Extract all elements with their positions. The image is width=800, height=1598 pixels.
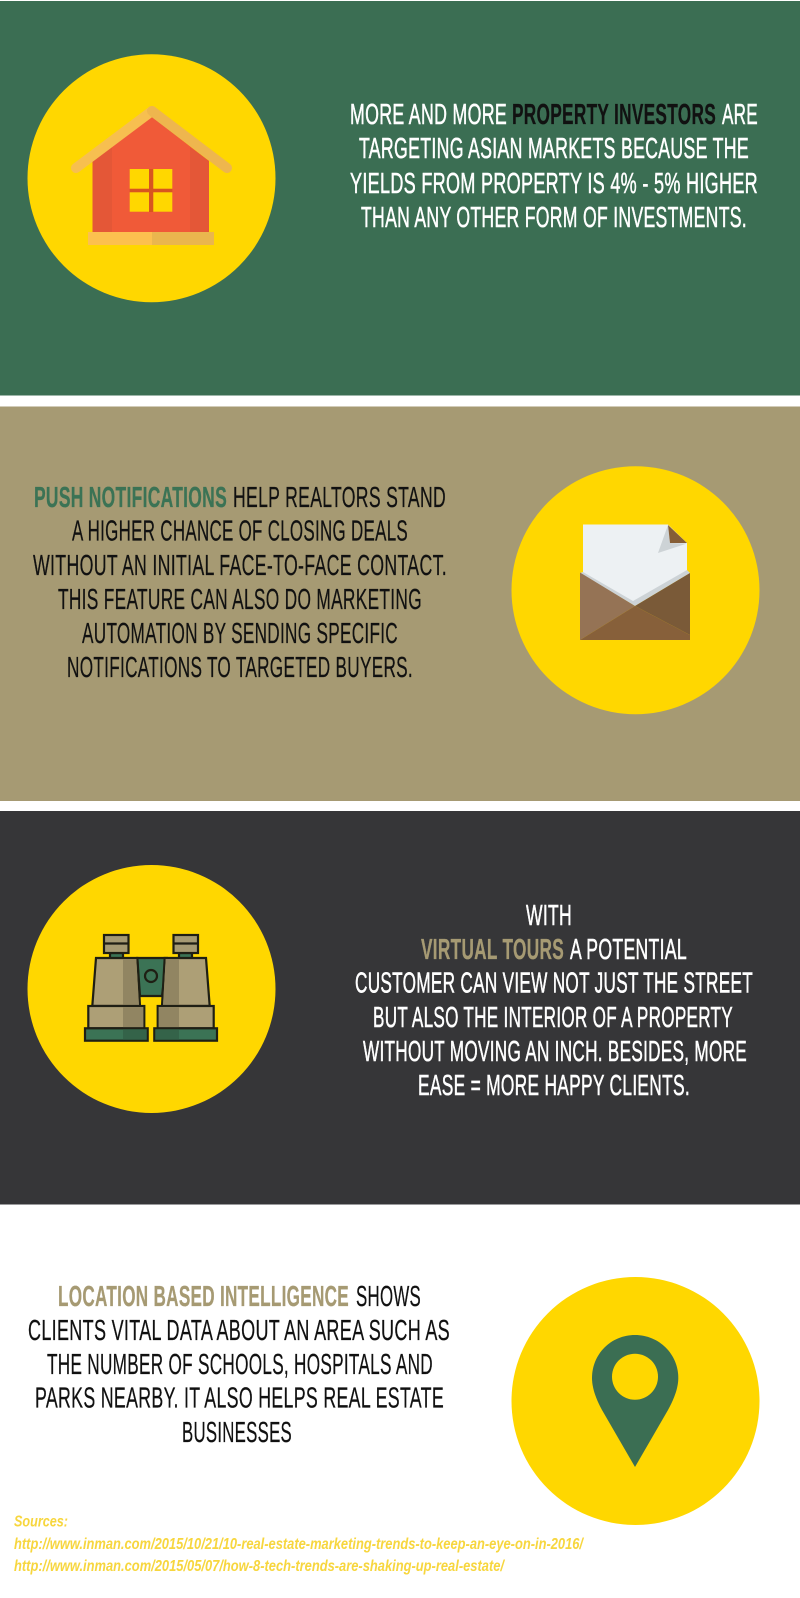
text: location based intelligence description: BUSINESSES [182,1417,292,1449]
text: property investors statement: ARE [722,99,758,131]
panel: virtual tours [0,811,800,1204]
text: virtual tours description: A POTENTIAL [570,934,687,966]
left barrel [85,935,148,1041]
text: push notifications description: WITHOUT AN INITIAL FACE-TO-FACE CONTACT. [33,550,447,582]
sources [14,1514,584,1575]
text: location based intelligence description: LOCATION BASED INTELLIGENCE [58,1281,349,1313]
sources: http://www.inman.com/2015/10/21/10-real-estate-marketing-trends-to-keep-an-eye-on-in-2016/ [14,1536,584,1553]
text: push notifications description [33,482,447,684]
right barrel [154,935,217,1041]
text: push notifications description: NOTIFICATIONS TO TARGETED BUYERS. [67,652,413,684]
text: property investors statement: MORE AND MORE [350,99,507,131]
icon: binoculars in yellow circle [28,865,276,1113]
text: virtual tours description: VIRTUAL TOURS [421,934,564,966]
text: location based intelligence description: CLIENTS VITAL DATA ABOUT AN AREA SUCH AS [28,1315,450,1347]
text: push notifications description: PUSH NOTIFICATIONS [34,482,227,514]
panel: push notifications [0,406,800,801]
sources: Sources: [14,1514,68,1530]
text: virtual tours description: WITH [526,900,572,932]
text: location based intelligence description: THE NUMBER OF SCHOOLS, HOSPITALS AND [47,1349,433,1381]
text: location based intelligence description [28,1281,450,1449]
icon: house in yellow circle [28,54,276,302]
text: push notifications description: A HIGHER CHANCE OF CLOSING DEALS [72,516,408,548]
text: push notifications description: HELP REALTORS STAND [233,482,446,514]
text: push notifications description: AUTOMATION BY SENDING SPECIFIC [82,618,398,650]
text: location based intelligence description: PARKS NEARBY. IT ALSO HELPS REAL ESTATE [35,1382,444,1414]
text: virtual tours description [355,900,753,1102]
text: property investors statement [350,99,758,234]
sources: http://www.inman.com/2015/05/07/how-8-tech-trends-are-shaking-up-real-estate/ [14,1558,505,1575]
panel: property investors [0,1,800,396]
text: push notifications description: THIS FEATURE CAN ALSO DO MARKETING [58,584,422,616]
icon: map pin in yellow circle [512,1277,760,1525]
text: location based intelligence description: SHOWS [356,1281,421,1313]
panel: location based intelligence [28,1277,760,1525]
icon: envelope in yellow circle [512,466,760,714]
